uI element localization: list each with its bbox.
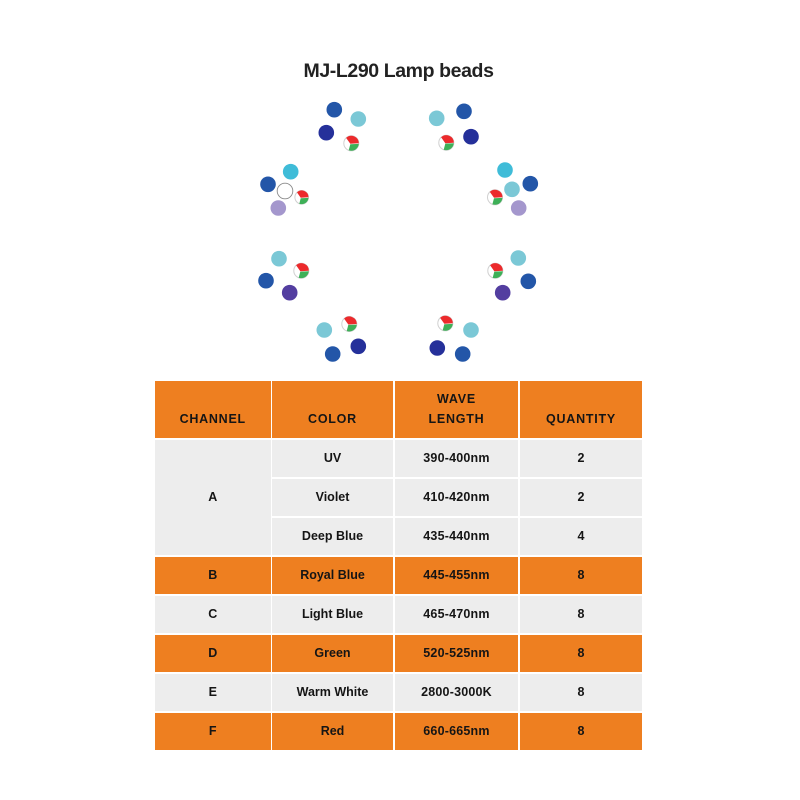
bead group: top left bbox=[318, 102, 366, 151]
row: channel B: B bbox=[208, 568, 217, 582]
header row: CHANNEL bbox=[180, 412, 246, 426]
bead group: bottom right bbox=[430, 316, 479, 362]
row: channel B: Royal Blue bbox=[300, 568, 365, 582]
row: Violet: 410-420nm bbox=[423, 490, 490, 504]
row: UV: 2 bbox=[578, 451, 584, 465]
row: channel C: C bbox=[208, 607, 217, 621]
row: channel D: Green bbox=[314, 646, 351, 660]
row: channel D bbox=[155, 635, 642, 672]
row: channel E bbox=[155, 674, 642, 711]
row: channel E: 2800-3000K bbox=[421, 685, 492, 699]
table: channel specifications bbox=[155, 381, 642, 750]
row: channel C bbox=[155, 596, 642, 633]
row: channel D: 8 bbox=[578, 646, 584, 660]
row: UV: 390-400nm bbox=[423, 451, 490, 465]
row: Deep Blue bbox=[272, 518, 642, 555]
title: MJ-L290 Lamp beads bbox=[303, 60, 494, 82]
row: Deep Blue: 435-440nm bbox=[423, 529, 490, 543]
row: channel F bbox=[155, 713, 642, 750]
row: Violet: 2 bbox=[578, 490, 584, 504]
channel A cell: A bbox=[208, 490, 217, 504]
header row bbox=[155, 381, 642, 438]
bead group: upper far left bbox=[260, 164, 309, 216]
row: channel B bbox=[155, 557, 642, 594]
row: Violet bbox=[272, 479, 642, 516]
row: channel B: 8 bbox=[578, 568, 584, 582]
bead group: upper far right bbox=[488, 162, 538, 216]
row: channel C: 465-470nm bbox=[423, 607, 490, 621]
row: channel C: Light Blue bbox=[302, 607, 363, 621]
bead group: bottom left bbox=[316, 316, 366, 362]
row: channel E: E bbox=[209, 685, 217, 699]
row: Violet: Violet bbox=[316, 490, 349, 504]
row: channel C: 8 bbox=[578, 607, 584, 621]
bead group: lower far left bbox=[258, 251, 309, 301]
row: channel F: 660-665nm bbox=[423, 724, 490, 738]
row: Deep Blue: 4 bbox=[578, 529, 584, 543]
bead group: top right bbox=[429, 104, 479, 150]
row: Deep Blue: Deep Blue bbox=[302, 529, 363, 543]
header row: COLOR bbox=[308, 412, 357, 426]
row: channel E: 8 bbox=[578, 685, 584, 699]
row: UV bbox=[272, 440, 642, 477]
header row: LENGTH bbox=[429, 412, 484, 426]
row: channel F: Red bbox=[321, 724, 344, 738]
header row: WAVE bbox=[437, 392, 476, 406]
row: channel E: Warm White bbox=[297, 685, 368, 699]
row: channel F: F bbox=[209, 724, 217, 738]
bead group: lower far right bbox=[488, 250, 536, 301]
row: channel F: 8 bbox=[578, 724, 584, 738]
header row: QUANTITY bbox=[546, 412, 616, 426]
row: channel D: D bbox=[208, 646, 217, 660]
channel A cell bbox=[155, 440, 270, 555]
lamp bead layout diagram bbox=[258, 102, 538, 362]
row: UV: UV bbox=[324, 451, 341, 465]
row: channel D: 520-525nm bbox=[423, 646, 490, 660]
row: channel B: 445-455nm bbox=[423, 568, 490, 582]
